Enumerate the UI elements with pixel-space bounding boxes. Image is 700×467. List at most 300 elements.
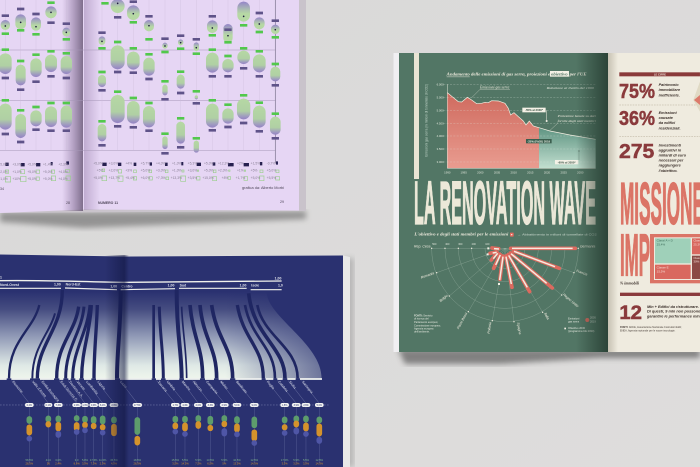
target reference note: Riduzione al livello del 1990 xyxy=(545,86,594,90)
stat: 36 percent xyxy=(619,108,681,130)
sankey bottom bar xyxy=(0,376,322,381)
x axis ticks: 2010 xyxy=(511,170,517,174)
region name labels: Basilicata xyxy=(235,380,248,394)
y axis ticks xyxy=(437,82,444,164)
pill values: 1,7% xyxy=(173,405,178,407)
stream values: 10,5% xyxy=(233,458,241,462)
projection note: fornite dagli stati membri xyxy=(558,119,596,123)
stat: 275: Investimenti xyxy=(659,143,682,147)
stat: 75 percent: inefficiente. xyxy=(659,93,680,97)
country labels: Italia xyxy=(543,312,550,320)
treemap: 15,5% xyxy=(657,269,665,273)
radial legend bottom: Obiettivo 2030 xyxy=(568,326,586,330)
country labels: Francia xyxy=(576,269,588,277)
source note: FONTI: Servizio xyxy=(414,313,433,317)
y axis title: Emissioni gas serra (in milioni di tonnellate di CO2) xyxy=(425,84,429,157)
pill values: 3,9% xyxy=(294,405,299,407)
magazine: navy spread with sankey chart xyxy=(0,254,350,467)
pill values: 4,4% xyxy=(182,405,188,407)
legend green squares xyxy=(5,169,280,182)
radial scale: 200 xyxy=(472,243,476,246)
legend values: +5,0% xyxy=(27,163,37,167)
bubble chart grid and bubbles: +3,5% xyxy=(188,176,197,180)
legend values: +5,0% xyxy=(93,162,103,166)
stat: 36 percent: residenziali. xyxy=(659,126,681,130)
bubble chart grid and bubbles: +3,0% xyxy=(188,169,197,173)
stat: 275 xyxy=(619,141,687,173)
region name labels: Sardegna xyxy=(301,380,314,394)
white inner bars xyxy=(493,248,573,287)
magazine: navy spread with sankey chart: 3,5% xyxy=(82,462,89,466)
purple drops xyxy=(29,430,319,443)
bubble chart grid and bubbles: +5,0% xyxy=(43,177,53,181)
callout 60 percent xyxy=(555,150,580,164)
treemap xyxy=(650,234,700,283)
x axis ticks: 2005 xyxy=(494,170,501,174)
bubbles row 1 xyxy=(1,0,280,51)
country labels: Germania xyxy=(580,245,595,249)
magazine: navy spread with sankey chart: 14,5% xyxy=(316,462,324,466)
source note: dell'ambiente. xyxy=(414,330,430,334)
vertical stems xyxy=(29,407,319,463)
bubble chart grid and bubbles: +5,0% xyxy=(93,176,103,180)
cream spine shade xyxy=(608,53,618,352)
green drops xyxy=(29,418,319,432)
x axis ticks: 1995 xyxy=(461,170,467,174)
sankey dividing streams xyxy=(9,290,298,378)
stream values: 13,5% xyxy=(207,458,215,462)
magazine: navy spread with sankey chart: 28,5% xyxy=(134,462,142,466)
region headers: 1 xyxy=(0,276,2,280)
region headers: 1,00 xyxy=(54,283,61,287)
source line: FONTI: ANCE, Associazione Nazionale Costruttori Edili; xyxy=(620,326,682,329)
side diamond icon xyxy=(693,82,700,112)
section header bar: LE CIFRE xyxy=(654,72,666,76)
stat: 275: 275 xyxy=(619,141,654,163)
pill values: 0,1% xyxy=(46,405,51,407)
stream values: 17,5% xyxy=(281,458,289,462)
region name labels: Lombardia xyxy=(85,380,99,395)
radial scale: 500 xyxy=(432,243,437,246)
sankey flow area xyxy=(0,292,322,378)
bubble chart grid and bubbles: +15,0% xyxy=(202,176,214,180)
source note xyxy=(414,313,441,334)
diagonal connector lines xyxy=(12,381,319,403)
stream values: 5,5% xyxy=(182,458,189,462)
highlighted word box xyxy=(550,71,569,77)
radial legend bottom: Emissioni xyxy=(568,316,580,320)
green projection area xyxy=(539,128,596,168)
green value labels xyxy=(2,3,279,138)
bubble chart grid and bubbles: +5,5% xyxy=(267,176,276,180)
y axis ticks: 4.500 xyxy=(437,121,444,125)
radial legend top xyxy=(510,233,597,237)
bubble chart grid and bubbles: +3% xyxy=(125,169,132,173)
stat: 275: necessari per xyxy=(659,159,684,163)
magazine: purple spread with bubble charts: NUMERO 11 xyxy=(98,201,118,205)
callout 60 percent: -60% al 2050* xyxy=(558,160,577,164)
target markers xyxy=(488,248,499,284)
pill values: 2,4% xyxy=(27,405,32,407)
green page xyxy=(399,53,608,352)
bubble chart grid and bubbles: +5% xyxy=(251,169,257,173)
region name labels: Molise xyxy=(219,380,229,390)
bubble chart grid and bubbles: +5,0% xyxy=(267,169,276,173)
magazine: La Renovation Wave spread xyxy=(394,53,700,352)
legend values: -0,7% xyxy=(267,162,275,166)
bubble chart grid and bubbles: +7,3% xyxy=(156,176,166,180)
magazine: navy spread with sankey chart: 56 xyxy=(47,462,50,466)
bubble chart grid and bubbles: +5,0% xyxy=(251,176,260,180)
stream values: 58,5% xyxy=(26,458,34,462)
bubble chart grid and bubbles: +10% xyxy=(12,177,21,181)
pill values: 0,9% xyxy=(91,405,96,407)
bubble chart grid and bubbles: +5% xyxy=(97,169,103,173)
y axis ticks: 3.000 xyxy=(437,160,444,164)
radial chart xyxy=(413,232,597,335)
stream values: 44,6 xyxy=(46,458,51,462)
pill values: 9,0% xyxy=(252,405,257,407)
stream values: 15,5% xyxy=(172,458,180,462)
pill values: 2,9% xyxy=(222,405,227,407)
stat: 36 percent: 36% xyxy=(619,108,655,130)
bubble chart grid and bubbles: +1,0% xyxy=(172,169,182,173)
magazine: navy spread with sankey chart: 7,5% xyxy=(195,462,202,466)
bubble chart grid and bubbles: +2,0% xyxy=(109,169,118,173)
x axis ticks: 2030 xyxy=(577,170,584,174)
pill values: 17,5% xyxy=(134,405,141,407)
x axis ticks: 1990 xyxy=(444,170,451,174)
radial dots xyxy=(432,248,578,322)
magazine: navy spread with sankey chart: 13,5% xyxy=(233,462,241,466)
legend values: +1,0% xyxy=(172,162,182,166)
stream values: 17,5% xyxy=(90,458,98,462)
stat: 75 percent: Patrimonio xyxy=(659,83,679,87)
stream values: 5,5% xyxy=(303,458,310,462)
axes xyxy=(447,84,596,168)
shadow: blue magazine xyxy=(344,258,354,467)
y axis ticks: 5.000 xyxy=(437,108,444,112)
region headers: 1,00 xyxy=(275,277,281,281)
divider xyxy=(619,104,700,106)
bubble chart grid and bubbles: +5,0% xyxy=(27,177,37,181)
y axis ticks: 5.000 xyxy=(437,95,444,99)
bubbles row 2 xyxy=(0,45,280,99)
x axis ticks xyxy=(444,170,584,174)
bubble chart grid and bubbles: +5,4% xyxy=(125,176,135,180)
country labels: Romania xyxy=(420,271,435,280)
pill values: 7,3% xyxy=(56,405,61,407)
purple pages xyxy=(0,0,299,213)
legend values: +3,0% xyxy=(109,162,118,166)
magazine: navy spread with sankey chart: 8,6% xyxy=(74,462,80,466)
region name labels: Friuli-Venezia G. xyxy=(59,380,79,402)
magazine: navy spread with sankey chart: 4,5% xyxy=(111,462,118,466)
region name labels: Emilia-Romagna xyxy=(41,380,60,402)
bubble chart grid and bubbles: +4,0% xyxy=(58,170,68,174)
pill values: 1,3% xyxy=(82,405,88,407)
bubble chart grid and bubbles: +5,0% xyxy=(43,170,53,174)
white pills xyxy=(27,399,322,411)
magazine: navy spread with sankey chart: 2,4% xyxy=(55,462,62,466)
region name labels: Marche xyxy=(181,380,191,392)
callout 55 percent: -55% al 2030* xyxy=(525,108,544,112)
bubble chart grid and bubbles: +1,0% xyxy=(12,170,22,174)
magazine: purple spread with bubble charts xyxy=(0,0,306,213)
projection note: Proiezione basate su dati xyxy=(557,114,596,118)
stat: 275: miliardi di euro xyxy=(659,154,687,158)
radial legend bottom xyxy=(564,316,596,333)
region name labels: Toscana xyxy=(157,380,168,393)
country labels: Polonia xyxy=(487,322,492,334)
y axis ticks: 6.000 xyxy=(437,82,444,86)
region headers xyxy=(0,276,283,289)
callout 55 percent xyxy=(522,108,548,122)
emissions annotation: Emissioni gas serra xyxy=(479,86,509,90)
region name labels: Abruzzo xyxy=(192,380,203,392)
country labels: Spagna xyxy=(516,322,522,335)
stat text xyxy=(646,305,700,319)
area chart xyxy=(425,71,596,174)
bubble chart grid and bubbles: +8% xyxy=(222,176,228,180)
stat: 75 percent: immobiliare xyxy=(659,88,681,92)
red rule xyxy=(620,293,700,296)
legend values: +3,0% xyxy=(12,163,22,167)
magazine: purple spread with bubble charts: grafica da: Alberto Morbi xyxy=(242,186,284,190)
pill values: 2,6% xyxy=(303,405,309,407)
treemap caption: % immobili xyxy=(620,280,640,285)
bubble chart grid and bubbles: +2,0% xyxy=(218,169,228,173)
bubble chart grid and bubbles: +5,0% xyxy=(27,170,37,174)
radial scale xyxy=(432,243,490,246)
grid lines xyxy=(443,84,596,162)
legend values: +4,0% xyxy=(156,162,166,166)
region name labels: Liguria xyxy=(97,380,106,391)
pill values: 6,1% xyxy=(100,405,105,407)
region name labels: Campania xyxy=(205,380,219,395)
stream values: 12,5% xyxy=(251,458,259,462)
radial legend bottom: 2019 xyxy=(590,320,596,324)
region headers: Isole xyxy=(251,283,259,287)
bubble chart grid and bubbles: +5,0% xyxy=(141,169,150,173)
x axis ticks: 2025 xyxy=(561,170,567,174)
stat: 36 percent: Emissioni xyxy=(659,111,678,115)
magazine: navy spread with sankey chart: 3,5% xyxy=(303,462,310,466)
region headers: Nord-Est xyxy=(66,283,81,287)
chart title: Andamento delle emissioni di gas serra, proiezioni e obiettivo per l'UE xyxy=(446,72,587,77)
page edge xyxy=(394,53,402,352)
x axis ticks: 2020 xyxy=(544,170,551,174)
magazine: purple spread with bubble charts: 28 xyxy=(66,201,70,205)
magazine: navy spread with sankey chart: 14,5% xyxy=(181,462,189,466)
magazine: navy spread with sankey chart: 3,5% xyxy=(282,462,288,466)
bubble chart grid and bubbles: +1,7% xyxy=(236,176,245,180)
cream page content xyxy=(619,72,700,173)
magazine: navy spread with sankey chart: 14,5% xyxy=(251,462,259,466)
x axis ticks: 2015 xyxy=(527,170,534,174)
bubbles row 3 xyxy=(0,95,281,153)
x axis ticks: 2000 xyxy=(477,170,484,174)
magazine: navy spread with sankey chart: 5% xyxy=(222,462,227,466)
treemap: 30% xyxy=(693,260,700,264)
source line xyxy=(620,326,682,332)
legend values: +2,3% xyxy=(58,163,68,167)
pill values: 5,1% xyxy=(234,405,240,407)
country labels xyxy=(414,245,595,335)
spine shadow xyxy=(62,0,83,211)
callout 2019: -25% (Fit55) 2019 xyxy=(527,139,551,143)
source line: ENEA, Agenzia nazionale per le nuove tecnologie. xyxy=(620,329,676,332)
pill values: 1,5% xyxy=(282,405,287,407)
centre dots xyxy=(5,3,275,48)
pill values: 2,0% xyxy=(196,405,201,407)
stat: 36 percent: causate xyxy=(659,116,674,120)
stream values: 5,5% xyxy=(293,458,300,462)
bubble chart grid and bubbles: +1% xyxy=(237,169,244,173)
source note: Agenzia europea xyxy=(414,327,434,331)
orange drops xyxy=(29,423,319,443)
country labels: Rep. Ceca xyxy=(414,245,431,249)
navy pages xyxy=(0,254,343,467)
region name labels: Puglia xyxy=(266,380,275,390)
red bars xyxy=(490,248,575,292)
projection note xyxy=(549,114,596,131)
sankey header bars xyxy=(0,281,282,282)
emissions line xyxy=(447,93,596,139)
legend values: +2% xyxy=(237,162,244,166)
region headers: 1,00 xyxy=(168,284,174,288)
bubble chart grid and bubbles: +5,0% xyxy=(204,169,214,173)
stat: 75 percent: 75% xyxy=(619,81,655,103)
shadow: green magazine xyxy=(398,349,700,364)
bubble chart grid and bubbles: +13,3% xyxy=(171,176,182,180)
region headers: 1,0 xyxy=(278,284,283,288)
pill values xyxy=(27,405,322,407)
page edge xyxy=(0,0,306,213)
red historic area xyxy=(447,93,539,168)
stream values: 3,0 xyxy=(75,458,79,462)
stat text: Di questi, 9 mln non possono xyxy=(647,310,700,314)
stat: 275: aggiuntivi in xyxy=(659,149,682,153)
stat: 275: raggiungere xyxy=(659,164,682,168)
spine shadow xyxy=(105,255,129,467)
dark value labels xyxy=(2,2,279,153)
stat: 75 percent xyxy=(619,81,681,103)
radial scale: 100 xyxy=(485,243,490,246)
radial legend top: → Abbattimento in milioni di tonnellate di CO2 xyxy=(517,233,597,237)
bubble chart grid and bubbles: +6,0% xyxy=(141,176,150,180)
stat: 36 percent: da edifici xyxy=(659,121,676,125)
spine shadow on green xyxy=(576,53,608,352)
region headers: Nord-Ovest xyxy=(0,283,20,287)
cream page xyxy=(608,53,700,352)
stream values: 18,5% xyxy=(134,458,142,462)
treemap: Classi A + D xyxy=(657,239,674,243)
stream values: 5,8% xyxy=(82,458,89,462)
dotted axis xyxy=(0,404,330,406)
radial heading: L'obiettivo e degli stati membri per le emissioni xyxy=(413,232,509,237)
radial legend bottom: gas serra xyxy=(568,320,580,324)
stat: 12: 12 xyxy=(619,303,642,324)
bubble chart grid and bubbles: +4,0% xyxy=(58,177,68,181)
country labels: Regno Unito xyxy=(562,293,579,308)
magazine: navy spread with sankey chart: 6,5% xyxy=(207,462,214,466)
radial legend bottom: 2005 xyxy=(590,316,596,320)
radial scale: 300 xyxy=(458,243,463,246)
axis line right xyxy=(274,0,276,163)
y axis ticks: 4.000 xyxy=(437,134,444,138)
radial legend bottom: (programma UE 2030) xyxy=(568,329,595,333)
treemap: Classe E xyxy=(657,265,669,269)
country labels: Belgio xyxy=(439,294,449,303)
region name labels: Calabria xyxy=(277,380,289,393)
region headers: Sud xyxy=(180,283,186,287)
y axis ticks: 3.500 xyxy=(437,147,444,151)
region name labels: Sicilia xyxy=(288,380,297,390)
pill values: 3,3% xyxy=(208,405,213,407)
legend values: +1,4% xyxy=(43,163,53,167)
pill values: 2,0% xyxy=(74,405,79,407)
bubble chart grid and bubbles xyxy=(0,0,281,182)
stream values: 3,6% xyxy=(55,458,62,462)
legend dark squares xyxy=(5,163,278,165)
region headers: Centro xyxy=(121,285,133,289)
legend values: +5,3% xyxy=(188,162,197,166)
pill values: 5,0% xyxy=(317,405,322,407)
magazine: navy spread with sankey chart: 3,5% xyxy=(293,462,300,466)
region name labels: Veneto xyxy=(76,380,86,391)
stream values: 5,5% xyxy=(195,458,202,462)
radial grid xyxy=(432,248,578,322)
pill values: 2,3% xyxy=(111,405,117,407)
cream lower content xyxy=(619,170,700,332)
magazine: navy spread with sankey chart: 3,5% xyxy=(172,462,179,466)
magazine: navy spread with sankey chart: 2,5% xyxy=(100,462,106,466)
country labels: Paesi Bassi xyxy=(456,312,468,330)
page edge xyxy=(0,255,350,467)
divider xyxy=(619,136,700,138)
emissions annotation xyxy=(472,86,510,98)
region name labels: Valle d'Aosta xyxy=(31,380,47,398)
region name labels: Lazio xyxy=(119,380,128,389)
source note: Parlamento europeo; xyxy=(414,320,438,324)
shadow: purple magazine xyxy=(0,211,306,228)
legend values: +12,3% xyxy=(218,162,229,166)
cream strip xyxy=(414,53,419,179)
region name labels xyxy=(11,380,314,402)
bubble chart grid and bubbles: +3,0% xyxy=(156,169,166,173)
magazine: purple spread with bubble charts: 29 xyxy=(280,200,284,204)
stat text: Mln + Edifici da ristrutturare. xyxy=(647,305,699,309)
magazine: navy spread with sankey chart: 7,5% xyxy=(91,462,97,466)
treemap: 25,4% xyxy=(657,243,665,247)
region name labels: Piemonte xyxy=(11,380,24,394)
region headers: 1,00 xyxy=(240,284,246,288)
stat: 275: l'obiettivo. xyxy=(659,169,678,173)
region name labels: Trentino-A.A. xyxy=(68,380,84,398)
highlighted word box: obiettivo xyxy=(551,71,568,76)
stream values: 15,5% xyxy=(110,458,118,462)
legend values: +5,7% xyxy=(141,162,150,166)
page folio and credits: 34 xyxy=(0,187,4,191)
source note: di ricerca del xyxy=(414,317,429,321)
stream values: 5,5% xyxy=(221,458,228,462)
radial scale: 400 xyxy=(445,243,450,246)
region headers: 1,00 xyxy=(110,284,117,288)
stream values: 11,5% xyxy=(99,458,107,462)
magazine: navy spread with sankey chart: 28,5% xyxy=(26,462,34,466)
legend values: +4% xyxy=(125,162,132,166)
